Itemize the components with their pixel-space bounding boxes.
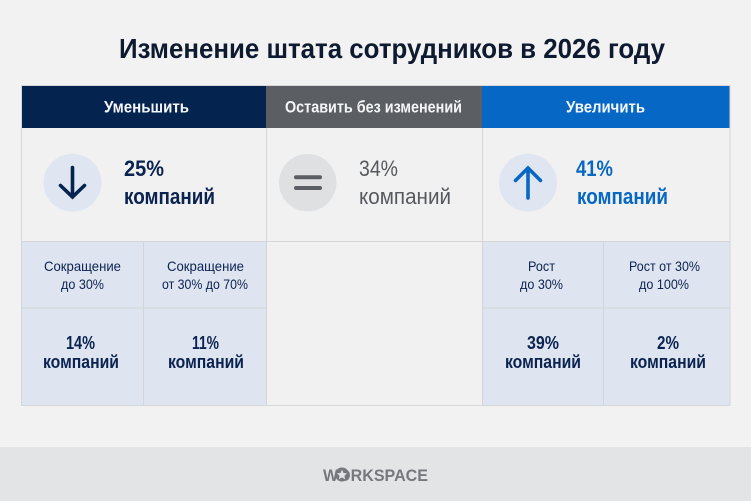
- stat: 41% companies: компаний: [577, 184, 668, 209]
- panel: reduce summary: [44, 154, 215, 212]
- cell: growth up to 30%: Рост: [528, 258, 556, 274]
- table: [22, 86, 730, 406]
- cell: growth 30% to 100%: компаний: [630, 352, 706, 372]
- sub-panel backgrounds: [22, 242, 730, 405]
- cell: growth 30% to 100%: до 100%: [639, 276, 689, 292]
- cell: cut 30% to 70%: 11%: [192, 333, 219, 353]
- cell: cut up to 30%: компаний: [43, 352, 119, 372]
- cell: cut up to 30%: 14%: [66, 333, 95, 353]
- cell: growth up to 30%: [505, 258, 581, 372]
- cell: growth up to 30%: компаний: [505, 352, 581, 372]
- cell: growth up to 30%: до 30%: [520, 276, 563, 292]
- cell: cut up to 30%: Сокращение: [44, 258, 121, 274]
- panel: unchanged summary: [279, 154, 451, 211]
- header: reduce: [22, 86, 266, 128]
- stat: 25% companies: 25%: [124, 156, 164, 181]
- cell: cut 30% to 70%: компаний: [168, 352, 244, 372]
- stat: 25% companies: компаний: [124, 184, 215, 209]
- header: increase: [482, 86, 730, 128]
- icon: star in logo O: [335, 468, 349, 482]
- stat: 41% companies: 41%: [576, 156, 613, 181]
- logo: WORKSPACE: WORKSPACE: [323, 466, 428, 485]
- cell: cut 30% to 70%: от 30% до 70%: [162, 276, 248, 292]
- stat: 25% companies: [124, 156, 215, 209]
- footer band: [0, 447, 751, 501]
- header: keep unchanged: Оставить без изменений: [285, 98, 462, 116]
- panel: increase summary: [499, 154, 668, 212]
- title: Изменение штата сотрудников в 2026 году: [119, 33, 665, 64]
- cell: growth 30% to 100%: [629, 258, 706, 372]
- icon: equals sign: [279, 154, 336, 211]
- cell: cut up to 30%: до 30%: [61, 276, 104, 292]
- stat: 34% companies: [359, 156, 451, 209]
- cell: growth up to 30%: 39%: [527, 333, 559, 353]
- cell: cut 30% to 70%: Сокращение: [167, 258, 244, 274]
- cell: cut 30% to 70%: [162, 258, 248, 372]
- cell: growth 30% to 100%: 2%: [657, 333, 679, 353]
- cell: cut up to 30%: [43, 258, 121, 372]
- stat: 41% companies: [576, 156, 668, 209]
- cell: growth 30% to 100%: Рост от 30%: [629, 258, 700, 274]
- stat: 34% companies: компаний: [359, 184, 451, 209]
- header: keep unchanged: [266, 86, 482, 128]
- icon: down arrow: [44, 154, 102, 212]
- icon: up arrow: [499, 154, 557, 212]
- stat: 34% companies: 34%: [359, 156, 398, 181]
- header: reduce: Уменьшить: [104, 98, 189, 116]
- header: increase: Увеличить: [566, 98, 645, 116]
